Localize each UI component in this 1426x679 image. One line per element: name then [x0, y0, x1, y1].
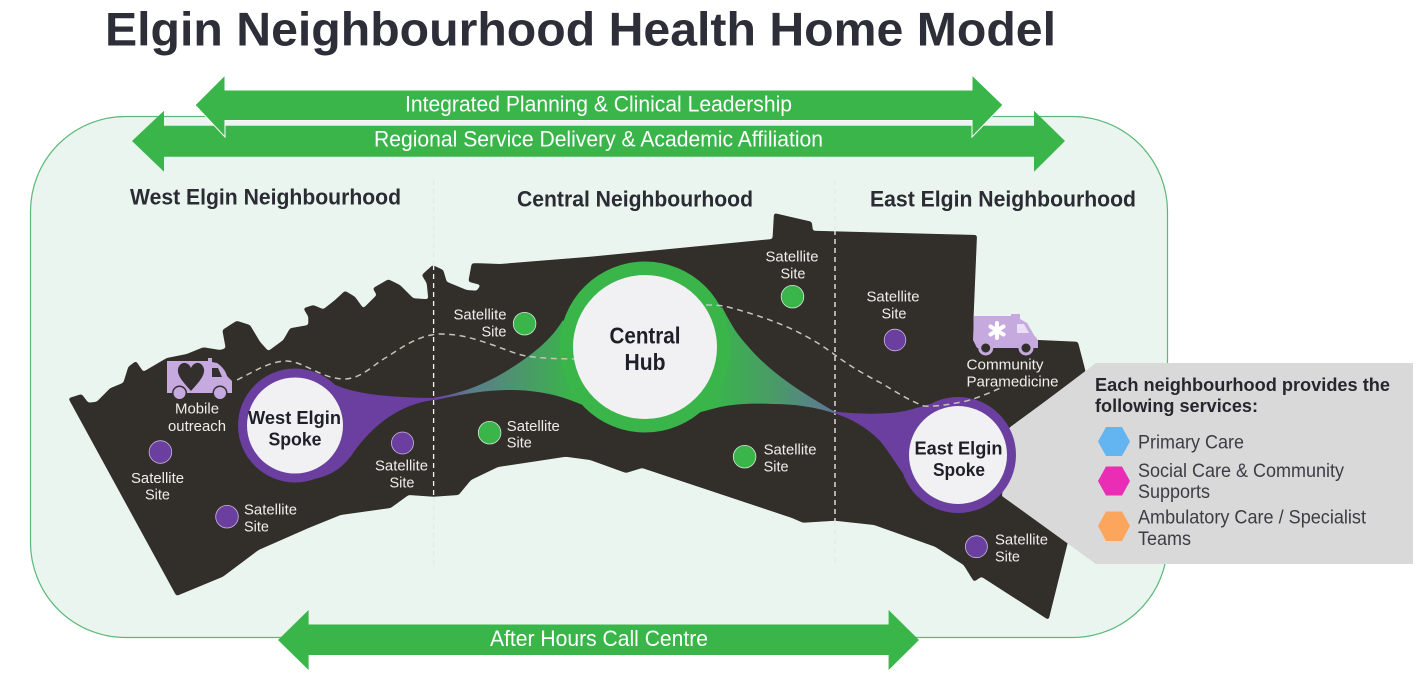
service: ambulatory care	[1138, 506, 1367, 550]
route: dashed line across region	[237, 305, 1003, 406]
icon: ambulatory care hexagon	[1098, 512, 1130, 541]
central hub	[573, 275, 717, 419]
heading: west elgin neighbourhood: West Elgin Neighbourhood	[130, 184, 401, 210]
label: mobile outreach: outreach	[168, 418, 226, 435]
service: social care: Social Care & Community	[1138, 460, 1344, 482]
callout: services provided	[1002, 363, 1413, 564]
icon: ambulance star	[990, 323, 1004, 338]
label: community paramedicine: Paramedicine	[966, 374, 1058, 390]
arrow: regional service delivery: Regional Service Delivery & Academic Affiliation	[374, 126, 823, 152]
arrow: integrated planning	[195, 75, 1003, 137]
connector: east spoke ring and link	[835, 397, 1016, 513]
service: ambulatory care: Teams	[1138, 528, 1191, 550]
satellite site: west 2	[216, 502, 297, 536]
satellite site: west 1	[131, 441, 184, 504]
central hub: Central	[610, 322, 680, 348]
connector: west gradient link to hub	[434, 320, 600, 405]
east elgin spoke: East Elgin	[914, 438, 1002, 458]
satellite site: central 3: Satellite	[766, 248, 818, 266]
neighbourhood divider: west / central	[433, 180, 435, 570]
east elgin spoke	[909, 406, 1007, 504]
service: social care	[1138, 460, 1344, 503]
west elgin spoke: West Elgin	[248, 407, 341, 428]
label: community paramedicine: Community	[966, 356, 1044, 374]
service: social care: Supports	[1138, 481, 1210, 503]
east elgin spoke: Spoke	[933, 459, 985, 480]
icon: mobile outreach van	[167, 358, 232, 400]
satellite site: central 4	[733, 442, 817, 476]
label: mobile outreach	[168, 400, 226, 435]
satellite site: central 3	[766, 248, 818, 308]
map: Elgin region silhouette	[68, 213, 1086, 620]
satellite site: east 2: Satellite	[995, 532, 1048, 548]
satellite site: west 3: Site	[390, 474, 414, 492]
satellite site: east 2: Site	[995, 548, 1020, 566]
satellite site: central 1: Satellite	[454, 306, 506, 324]
satellite site: central 3: Site	[780, 266, 806, 282]
service: primary care: Primary Care	[1138, 432, 1244, 454]
label: community paramedicine	[966, 356, 1058, 390]
satellite site: central 1	[454, 306, 536, 340]
satellite site: central 4: Site	[764, 458, 789, 476]
icon: primary care hexagon	[1098, 427, 1130, 456]
icon: social care hexagon	[1098, 466, 1130, 496]
satellite site: east 1: Satellite	[866, 288, 920, 306]
arrow: integrated planning: Integrated Planning & Clinical Leadership	[405, 92, 792, 116]
satellite site: central 2: Satellite	[507, 418, 560, 435]
heading: east elgin neighbourhood: East Elgin Neighbourhood	[870, 186, 1136, 212]
satellite site: central 2: Site	[507, 434, 532, 452]
arrow: regional service delivery	[132, 111, 1065, 172]
arrow: after hours call centre: After Hours Call Centre	[490, 626, 708, 651]
panel: neighbourhood background	[30, 116, 1168, 638]
heading: central neighbourhood: Central Neighbourhood	[517, 186, 753, 212]
satellite site: west 2: Satellite	[244, 502, 297, 518]
west elgin spoke	[247, 378, 343, 474]
satellite site: west 1: Site	[145, 486, 170, 504]
satellite site: west 3	[375, 432, 428, 492]
callout heading: following services:	[1095, 396, 1258, 416]
satellite site: central 2	[478, 418, 560, 452]
satellite site: central 1: Site	[482, 324, 506, 340]
arrow: after hours call centre	[278, 610, 919, 670]
satellite site: east 2	[965, 532, 1048, 566]
title: Elgin Neighbourhood Health Home Model	[105, 4, 1056, 56]
satellite site: west 2: Site	[244, 518, 269, 536]
icon: community paramedicine ambulance	[973, 314, 1038, 356]
satellite site: central 4: Satellite	[764, 442, 817, 458]
satellite site: east 1: Site	[882, 306, 906, 322]
satellite site: east 1	[866, 288, 920, 351]
callout heading: Each neighbourhood provides the	[1095, 375, 1390, 395]
hub ring: central	[560, 262, 730, 432]
label: mobile outreach: Mobile	[175, 400, 219, 418]
west elgin spoke: Spoke	[268, 428, 322, 450]
satellite site: west 1: Satellite	[131, 470, 184, 487]
neighbourhood divider: central / east	[834, 180, 836, 565]
service: ambulatory care: Ambulatory Care / Specialist	[1138, 506, 1367, 528]
connector: east gradient link from hub	[680, 307, 835, 414]
central hub: Hub	[624, 349, 666, 375]
connector: west spoke ring and link	[238, 368, 434, 482]
callout heading	[1095, 375, 1390, 416]
satellite site: west 3: Satellite	[375, 458, 428, 474]
